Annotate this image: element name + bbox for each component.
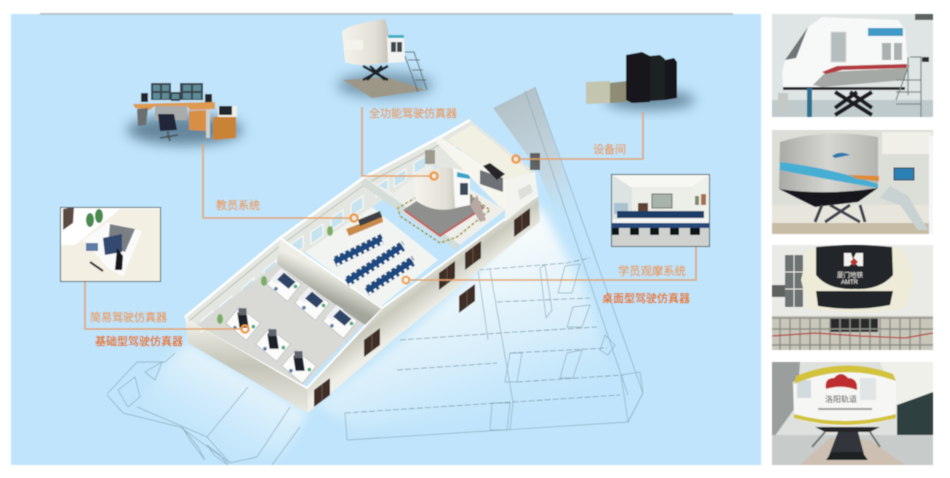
student desks xyxy=(335,236,415,294)
callout: equipment room xyxy=(512,112,643,163)
photo: Luoyang rail simulator xyxy=(772,362,933,465)
inset: trainee observation room xyxy=(611,174,710,247)
callout: simple simulator xyxy=(85,282,249,333)
callout: equipment room: 设备间 xyxy=(593,142,626,156)
ghost wireframe building xyxy=(107,87,643,465)
left end wall xyxy=(185,318,308,413)
inset: simple simulator xyxy=(60,207,161,282)
wall doors xyxy=(314,208,530,407)
callout: trainee observation system: 学员观摩系统 xyxy=(618,264,686,278)
callout: instructor system xyxy=(203,144,358,222)
photo: Xiamen metro simulator: AMTR xyxy=(841,280,859,286)
photo column xyxy=(772,14,933,465)
photo: round dome simulator with blue stripe xyxy=(772,130,933,234)
room: trainee observation xyxy=(305,207,438,307)
label: basic simulator: 基础型驾驶仿真器 xyxy=(95,334,183,348)
callout: full-function simulator: 全功能驾驶仿真器 xyxy=(369,106,457,120)
callout: simple simulator: 简易驾驶仿真器 xyxy=(90,310,167,324)
room: equipment xyxy=(436,125,540,222)
building model xyxy=(185,120,540,413)
callout: instructor system: 教员系统 xyxy=(216,199,260,212)
instructor system equipment xyxy=(127,83,243,145)
instructor desk miniature xyxy=(346,211,383,236)
room: basic simulators xyxy=(197,238,382,385)
callout: full-function simulator xyxy=(362,106,457,180)
photo: Luoyang rail simulator: 洛阳轨道 xyxy=(825,394,857,404)
windows xyxy=(201,138,465,332)
photo: white train cab simulator xyxy=(772,14,933,117)
full-function simulator equipment xyxy=(337,19,433,98)
room: full-function simulator xyxy=(360,150,505,250)
outer front wall xyxy=(307,195,540,413)
photo: Xiamen metro simulator: 厦门地铁 xyxy=(837,270,864,279)
equipment room racks xyxy=(586,52,695,110)
main diagram panel xyxy=(11,13,761,465)
back wall xyxy=(185,120,538,325)
label: desktop simulator: 桌面型驾驶仿真器 xyxy=(602,291,690,305)
photo: Xiamen metro simulator xyxy=(772,245,933,350)
callout: trainee observation system xyxy=(403,247,696,283)
